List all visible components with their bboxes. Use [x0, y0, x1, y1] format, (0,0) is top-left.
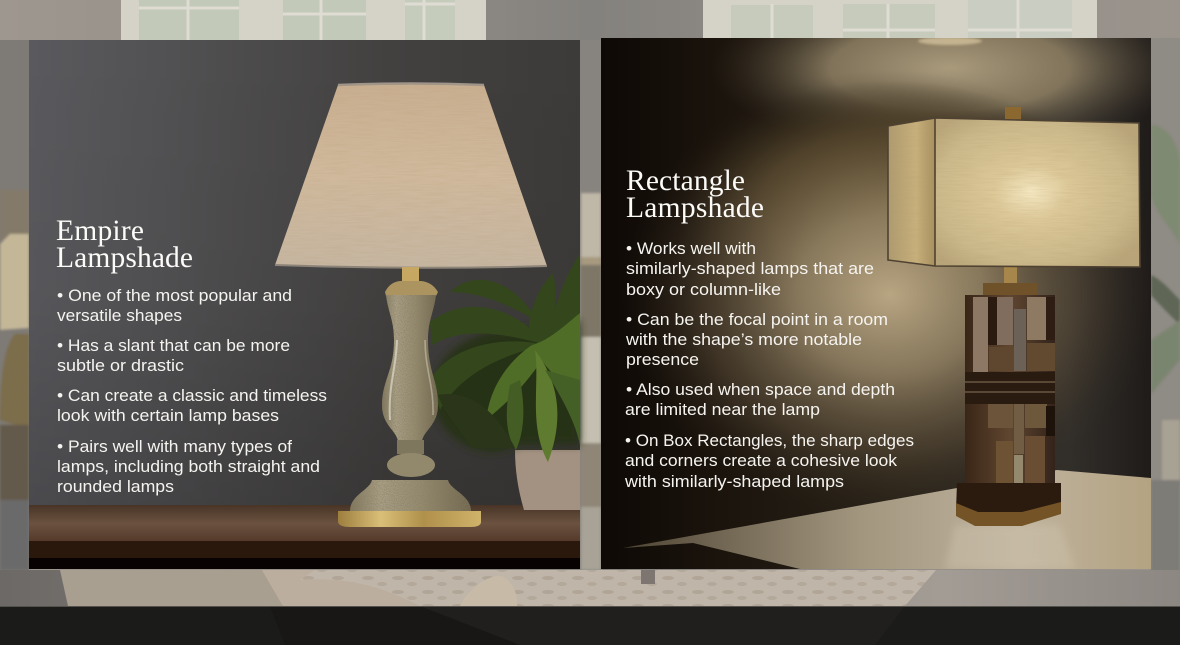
heading: Empire Lampshade: Empire: [56, 215, 144, 247]
background: center lamp and sofa: [581, 193, 601, 570]
lamp: Empire base: [338, 267, 481, 527]
heading: Rectangle Lampshade: Lampshade: [626, 192, 764, 224]
text block: Empire bullets: subtle or drastic: [57, 356, 185, 375]
text block: Rectangle bullets: with similarly-shaped lamps: [624, 472, 844, 491]
background: right windows: [703, 0, 1097, 40]
text block: Rectangle bullets: • Can be the focal point in a room: [626, 310, 888, 329]
text block: Empire bullets: • Can create a classic and timeless: [57, 386, 327, 405]
text block: Empire bullets: rounded lamps: [57, 477, 174, 496]
text block: Rectangle bullets: are limited near the lamp: [625, 400, 820, 419]
text block: Empire bullets: [57, 286, 327, 496]
heading: Rectangle Lampshade: Rectangle: [626, 165, 745, 197]
text block: Empire bullets: • Pairs well with many types of: [57, 437, 292, 456]
heading: Empire Lampshade: [56, 215, 193, 274]
lamp: rectangle base: [956, 267, 1061, 526]
text block: Empire bullets: lamps, including both straight and: [57, 457, 320, 476]
background: left windows: [121, 0, 486, 40]
text block: Empire bullets: • Has a slant that can be more: [57, 336, 290, 355]
background: floor and rug: [0, 570, 1180, 606]
text block: Rectangle bullets: and corners create a cohesive look: [625, 451, 898, 470]
table top: [29, 505, 580, 569]
panel: Rectangle lampshade: [601, 37, 1160, 569]
panel: Empire lampshade: [29, 40, 580, 569]
text block: Rectangle bullets: • Works well with: [626, 239, 756, 258]
heading: Empire Lampshade: Lampshade: [56, 242, 193, 274]
text block: Empire bullets: look with certain lamp bases: [57, 406, 279, 425]
lamp: Empire shade: [275, 84, 547, 268]
background: right plant: [1151, 125, 1180, 573]
heading: Rectangle Lampshade: [626, 165, 764, 224]
bottom dark bar: [0, 606, 1180, 645]
lamp: rectangle shade: [888, 107, 1140, 267]
text block: Rectangle bullets: presence: [626, 350, 699, 369]
text block: Rectangle bullets: [624, 239, 914, 491]
ceiling light glow: [732, 38, 1151, 122]
text block: Rectangle bullets: • On Box Rectangles, the sharp edges: [625, 431, 914, 450]
text block: Rectangle bullets: boxy or column-like: [626, 280, 781, 299]
text block: Empire bullets: • One of the most popular and: [57, 286, 292, 305]
wall warm glow: [650, 80, 1118, 484]
text block: Rectangle bullets: similarly-shaped lamps that are: [626, 259, 874, 278]
background: left table lamp: [0, 190, 29, 570]
potted plant: [430, 254, 580, 510]
text block: Rectangle bullets: with the shape’s more notable: [625, 330, 862, 349]
text block: Rectangle bullets: • Also used when space and depth: [626, 380, 895, 399]
text block: Empire bullets: versatile shapes: [57, 306, 182, 325]
table surface: [623, 470, 1151, 569]
